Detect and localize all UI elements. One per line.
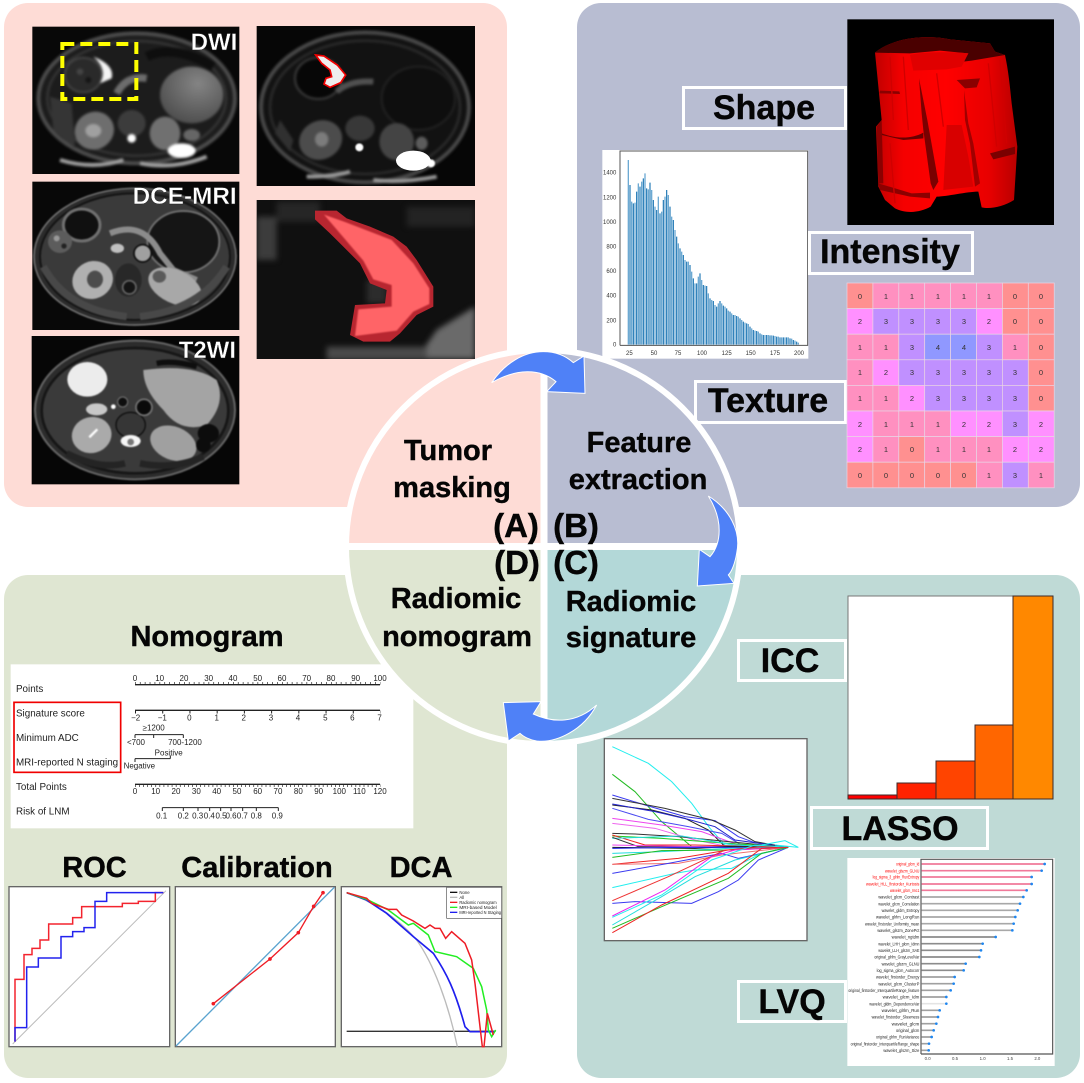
heatmap values: 3 bbox=[910, 317, 914, 326]
total points labels: 70 bbox=[274, 787, 283, 796]
arrow: radiomic signature to nomogram bbox=[503, 702, 597, 741]
total points labels: 40 bbox=[212, 787, 222, 796]
heatmap values: 1 bbox=[858, 343, 862, 352]
heatmap values: 3 bbox=[962, 394, 966, 403]
heading: Nomogram: Nomogram bbox=[130, 621, 284, 653]
arrow: feature extraction to radiomic signature bbox=[697, 496, 738, 586]
histogram axis labels: 1200 bbox=[603, 195, 617, 201]
lollipop dots bbox=[927, 863, 1046, 1052]
heatmap values: 0 bbox=[1039, 394, 1043, 403]
risk labels: 0.1 bbox=[156, 811, 168, 820]
heatmap values: 3 bbox=[987, 368, 991, 377]
points scale labels: 70 bbox=[302, 674, 312, 683]
ROC chart bbox=[9, 887, 170, 1047]
total points labels: 80 bbox=[294, 787, 303, 796]
histogram chart bbox=[602, 150, 808, 359]
feature names: wavelet_HLL_firstorder_Kurtosis bbox=[866, 882, 920, 888]
heatmap values: 0 bbox=[936, 471, 940, 480]
heatmap values: 2 bbox=[1013, 445, 1017, 454]
points scale labels: 80 bbox=[327, 674, 336, 683]
heatmap values: 0 bbox=[1013, 317, 1017, 326]
histogram axis labels: 800 bbox=[606, 244, 617, 250]
letter: B: (B) bbox=[553, 507, 599, 544]
row names: Total Points bbox=[16, 782, 67, 793]
signature score labels: 3 bbox=[269, 713, 274, 722]
stage label: Radiomic nomogram bbox=[382, 583, 532, 653]
label box: LASSO: LASSO bbox=[841, 810, 959, 848]
heatmap values: 1 bbox=[987, 292, 991, 301]
heatmap values: 1 bbox=[962, 445, 966, 454]
label: T2WI: T2WI bbox=[179, 337, 236, 364]
heatmap values: 2 bbox=[962, 420, 966, 429]
heatmap values: 1 bbox=[858, 394, 862, 403]
MRI image: tumor outline bbox=[257, 26, 475, 186]
points scale labels: 30 bbox=[204, 674, 214, 683]
histogram axis labels: 25 bbox=[626, 351, 633, 357]
stage label: Feature extraction bbox=[569, 427, 707, 496]
heatmap values: 2 bbox=[987, 420, 991, 429]
label box: Intensity: Intensity bbox=[820, 233, 960, 271]
total points labels: 110 bbox=[353, 787, 366, 796]
heatmap values: 1 bbox=[884, 420, 888, 429]
heatmap values: 0 bbox=[1039, 343, 1043, 352]
feature names: wavelet_LHH_glcm_Idmn bbox=[878, 941, 919, 947]
feature names: wavelet_glcm bbox=[892, 1021, 919, 1027]
row names: Signature score bbox=[16, 708, 85, 719]
feature names: original_glrlm_RunVariance bbox=[876, 1035, 919, 1041]
feature names: wavelet_glcm_ClusterP bbox=[878, 981, 920, 987]
DCA legend: MRI-based Model bbox=[459, 905, 497, 910]
histogram bars bbox=[628, 160, 798, 345]
heatmap values: 3 bbox=[936, 317, 940, 326]
feature names: wavelet_glcm_Idm bbox=[883, 995, 919, 1001]
points scale labels: 40 bbox=[229, 674, 238, 683]
row names: Points bbox=[16, 684, 43, 695]
minimum ADC labels: ≥1200 bbox=[143, 723, 165, 732]
image: 3D tumor shape bbox=[847, 19, 1054, 225]
label box: LASSO bbox=[812, 808, 988, 848]
DCA legend bbox=[447, 887, 502, 918]
feature names bbox=[848, 862, 920, 1054]
points scale labels bbox=[133, 674, 387, 683]
label box: LVQ: LVQ bbox=[758, 983, 826, 1021]
stage label: Radiomic signature bbox=[566, 586, 696, 654]
total points labels: 60 bbox=[253, 787, 263, 796]
heatmap values: 0 bbox=[1013, 292, 1017, 301]
heatmap values: 1 bbox=[858, 368, 862, 377]
N staging labels: Positive bbox=[155, 748, 183, 757]
histogram axis labels: 150 bbox=[746, 351, 756, 357]
heatmap values: 1 bbox=[936, 420, 940, 429]
nomogram axes bbox=[135, 683, 380, 811]
letter: C: (C) bbox=[553, 544, 599, 581]
central workflow disc bbox=[340, 340, 746, 750]
label: DCE-MRI: DCE-MRI bbox=[133, 183, 237, 210]
axis labels: 0.0 bbox=[925, 1056, 931, 1061]
heatmap values: 3 bbox=[1013, 394, 1017, 403]
letter: D: (D) bbox=[494, 544, 540, 581]
lollipop stems bbox=[922, 864, 1045, 1050]
DCA legend: MRI-reported N Staging bbox=[459, 910, 502, 915]
risk labels: 0.5 bbox=[215, 811, 227, 820]
feature names: wavelet_LLH_glszm_SAE bbox=[878, 948, 920, 954]
histogram axis labels: 125 bbox=[722, 351, 732, 357]
axis labels: 1.0 bbox=[980, 1056, 986, 1061]
signature score labels: 6 bbox=[350, 713, 355, 722]
points scale labels: 100 bbox=[373, 674, 387, 683]
feature names: wavelet_gldm_DependenceVar bbox=[869, 1001, 920, 1007]
heatmap values: 2 bbox=[1039, 420, 1043, 429]
heatmap values: 2 bbox=[987, 317, 991, 326]
heatmap values: 3 bbox=[910, 368, 914, 377]
ICC bar chart bbox=[848, 596, 1053, 799]
red tumor mask bbox=[315, 211, 433, 342]
panel: radiomic signature bbox=[577, 575, 1080, 1078]
label box: ICC bbox=[738, 640, 846, 680]
heatmap values: 0 bbox=[1039, 317, 1043, 326]
minimum ADC labels: <700 bbox=[127, 738, 146, 747]
risk labels: 0.9 bbox=[272, 811, 283, 820]
LASSO coefficient path chart bbox=[604, 739, 807, 941]
heatmap values: 4 bbox=[962, 343, 966, 352]
signature score labels bbox=[131, 713, 382, 722]
histogram axis labels: 1000 bbox=[603, 220, 617, 226]
feature names: original_glcm_Id bbox=[896, 862, 919, 868]
histogram axis labels: 100 bbox=[697, 351, 708, 357]
calibration chart bbox=[175, 887, 335, 1047]
heatmap values: 3 bbox=[884, 317, 888, 326]
points scale labels: 0 bbox=[133, 674, 138, 683]
heatmap values: 1 bbox=[987, 471, 991, 480]
heatmap values: 3 bbox=[910, 343, 914, 352]
signature score labels: 7 bbox=[377, 713, 382, 722]
DCA legend: Radiomic nomogram bbox=[459, 900, 497, 905]
risk labels bbox=[156, 811, 283, 820]
red selection box bbox=[14, 702, 121, 772]
DCA legend: None bbox=[459, 890, 470, 895]
heatmap values: 3 bbox=[1013, 420, 1017, 429]
total points labels: 10 bbox=[151, 787, 161, 796]
stage label: Tumor masking bbox=[393, 435, 511, 504]
histogram axis labels bbox=[603, 171, 805, 357]
feature names: log_sigma_glcm_Autocorr bbox=[877, 968, 920, 974]
histogram axis labels: 400 bbox=[606, 294, 617, 300]
heatmap values: 1 bbox=[1039, 471, 1043, 480]
label box: Shape: Shape bbox=[713, 89, 815, 127]
signature score labels: 4 bbox=[296, 713, 301, 722]
MRI image: T2WI bbox=[32, 336, 239, 484]
heading: DCA: DCA bbox=[390, 852, 452, 884]
feature names: wavelet_glszm_GLNU bbox=[882, 961, 920, 967]
stage label: Feature extraction: Feature bbox=[587, 427, 691, 459]
histogram axis labels: 75 bbox=[675, 351, 682, 357]
heatmap values: 1 bbox=[1013, 343, 1017, 352]
total points labels: 0 bbox=[133, 787, 138, 796]
panel: tumor masking bbox=[4, 3, 507, 507]
N staging labels: Negative bbox=[124, 761, 156, 770]
risk labels: 0.4 bbox=[204, 811, 215, 820]
label box: LVQ bbox=[738, 982, 846, 1022]
histogram axis labels: 200 bbox=[606, 318, 617, 324]
axis labels: 0.5 bbox=[952, 1056, 959, 1061]
heatmap values: 2 bbox=[858, 317, 862, 326]
heatmap values: 2 bbox=[884, 368, 888, 377]
feature names: wavelet_firstorder_Uniformity_mean bbox=[865, 921, 919, 927]
heatmap values: 0 bbox=[1039, 292, 1043, 301]
total points labels bbox=[133, 787, 387, 796]
histogram axis labels: 0 bbox=[613, 343, 617, 349]
feature names: original_glcm bbox=[896, 1028, 919, 1034]
MRI image: DWI bbox=[32, 27, 239, 174]
feature names: wavelet_glrlm_LongRun bbox=[876, 915, 920, 921]
feature names: wavelet_firstorder_Energy bbox=[876, 975, 920, 981]
heading: Calibration: Calibration bbox=[181, 852, 333, 884]
total points labels: 30 bbox=[192, 787, 201, 796]
total points labels: 20 bbox=[172, 787, 181, 796]
histogram axis labels: 1400 bbox=[603, 171, 617, 177]
heatmap values: 1 bbox=[910, 420, 914, 429]
axis labels: 1.5 bbox=[1007, 1056, 1014, 1061]
label box: Texture: Texture bbox=[708, 382, 828, 420]
minimum ADC labels bbox=[127, 723, 202, 747]
feature names: wavelet_firstorder_Skewness bbox=[872, 1015, 920, 1021]
feature names: wavelet_glrlm_Run bbox=[882, 1008, 920, 1014]
histogram axis labels: 175 bbox=[770, 351, 781, 357]
heatmap values: 2 bbox=[858, 420, 862, 429]
heatmap values: 1 bbox=[884, 292, 888, 301]
total points labels: 50 bbox=[233, 787, 242, 796]
histogram axis labels: 600 bbox=[606, 269, 617, 275]
feature names: wavelet_glszm_Size bbox=[883, 1048, 920, 1054]
points scale labels: 60 bbox=[278, 674, 287, 683]
heatmap values: 3 bbox=[936, 394, 940, 403]
DCA chart bbox=[341, 887, 502, 1047]
heatmap values: 1 bbox=[936, 445, 940, 454]
points scale labels: 90 bbox=[351, 674, 361, 683]
stage label: Radiomic signature: signature bbox=[566, 622, 696, 654]
nomogram chart bbox=[11, 664, 413, 828]
stage label: Radiomic nomogram: nomogram bbox=[382, 621, 532, 653]
points scale labels: 10 bbox=[155, 674, 165, 683]
feature names: wavelet_glszm_GLNU bbox=[885, 868, 920, 874]
feature names: original_glrlm_GrayLevelVar bbox=[874, 955, 920, 961]
heatmap values: 1 bbox=[884, 394, 888, 403]
heatmap values: 4 bbox=[936, 343, 940, 352]
heatmap values: 3 bbox=[962, 317, 966, 326]
stage label: Tumor masking: Tumor bbox=[404, 435, 492, 467]
LVQ feature importance chart bbox=[847, 858, 1055, 1066]
heatmap values: 1 bbox=[962, 292, 966, 301]
heatmap values: 3 bbox=[987, 394, 991, 403]
feature names: wavelet_glcm_Contrast bbox=[878, 895, 920, 901]
risk labels: 0.8 bbox=[251, 811, 262, 820]
feature names: log_sigma_3_glrlm_RunEntropy bbox=[873, 875, 920, 881]
texture matrix heatmap bbox=[847, 283, 1054, 488]
MRI image: magnified tumor mask bbox=[257, 200, 475, 360]
risk labels: 0.3 bbox=[192, 811, 204, 820]
heatmap values: 1 bbox=[987, 445, 991, 454]
heatmap values: 3 bbox=[987, 343, 991, 352]
signature score labels: −2 bbox=[131, 713, 141, 722]
signature score labels: 1 bbox=[214, 713, 219, 722]
heatmap values: 0 bbox=[962, 471, 966, 480]
feature names: wavelet_glszm_ZonePct bbox=[877, 928, 920, 934]
axis labels: 2.0 bbox=[1034, 1056, 1041, 1061]
label box: Shape bbox=[684, 88, 846, 128]
heatmap values: 0 bbox=[858, 292, 862, 301]
label box: ICC: ICC bbox=[761, 642, 819, 680]
risk labels: 0.2 bbox=[178, 811, 189, 820]
letter: A: (A) bbox=[493, 507, 539, 544]
tumor contour bbox=[316, 55, 346, 87]
total points labels: 120 bbox=[373, 787, 387, 796]
stage label: Radiomic signature: Radiomic bbox=[566, 586, 696, 618]
feature names: original_firstorder_InterquartileRange_shape bbox=[851, 1041, 919, 1047]
panel: radiomic nomogram bbox=[4, 575, 507, 1078]
heatmap values: 1 bbox=[910, 292, 914, 301]
heatmap values: 1 bbox=[884, 445, 888, 454]
arrow: tumor masking to feature extraction bbox=[492, 352, 585, 393]
signature score labels: −1 bbox=[158, 713, 167, 722]
heatmap values: 1 bbox=[884, 343, 888, 352]
feature names: wavelet_glcm_Correlation bbox=[878, 901, 919, 907]
heatmap values: 3 bbox=[1013, 471, 1017, 480]
heatmap values: 0 bbox=[1039, 368, 1043, 377]
signature score labels: 0 bbox=[187, 713, 192, 722]
N staging labels bbox=[124, 748, 183, 770]
points scale labels: 50 bbox=[253, 674, 263, 683]
feature names: wavelet_ngtdm bbox=[892, 935, 919, 941]
MRI image: DCE-MRI bbox=[32, 182, 239, 330]
feature names: original_firstorder_InterquartileRange_feature bbox=[848, 988, 919, 994]
heatmap values bbox=[858, 292, 1043, 480]
risk labels: 0.7 bbox=[237, 811, 248, 820]
heatmap values: 1 bbox=[936, 292, 940, 301]
signature score labels: 2 bbox=[241, 713, 246, 722]
axis labels bbox=[925, 1056, 1041, 1061]
points scale labels: 20 bbox=[180, 674, 189, 683]
stage label: Tumor masking: masking bbox=[393, 472, 511, 504]
signature score labels: 5 bbox=[323, 713, 328, 722]
heatmap values: 0 bbox=[910, 445, 914, 454]
histogram axis labels: 50 bbox=[651, 351, 658, 357]
row names bbox=[16, 684, 118, 817]
row names: MRI-reported N staging bbox=[16, 758, 118, 769]
heatmap values: 2 bbox=[910, 394, 914, 403]
DCA legend: All bbox=[459, 895, 464, 900]
dashed tumor marker bbox=[62, 44, 136, 99]
heatmap values: 0 bbox=[910, 471, 914, 480]
heatmap values: 3 bbox=[1013, 368, 1017, 377]
heatmap values: 3 bbox=[962, 368, 966, 377]
heading: ROC: ROC bbox=[62, 852, 127, 884]
label: DWI: DWI bbox=[191, 29, 237, 56]
feature names: wavelet_glcm_Imc1 bbox=[890, 888, 919, 894]
heatmap values: 2 bbox=[1039, 445, 1043, 454]
heatmap values: 0 bbox=[858, 471, 862, 480]
heatmap values: 0 bbox=[884, 471, 888, 480]
panel: feature extraction bbox=[577, 3, 1080, 507]
total points labels: 90 bbox=[314, 787, 324, 796]
minimum ADC labels: 700-1200 bbox=[168, 738, 202, 747]
risk labels: 0.6 bbox=[225, 811, 237, 820]
heatmap values: 3 bbox=[936, 368, 940, 377]
stage label: Feature extraction: extraction bbox=[569, 464, 707, 496]
row names: Minimum ADC bbox=[16, 733, 79, 744]
histogram axis labels: 200 bbox=[794, 351, 805, 357]
row names: Risk of LNM bbox=[16, 806, 70, 817]
feature names: wavelet_gldm_Entropy bbox=[882, 908, 920, 914]
total points labels: 100 bbox=[333, 787, 347, 796]
heatmap values: 2 bbox=[858, 445, 862, 454]
stage label: Radiomic nomogram: Radiomic bbox=[391, 583, 521, 615]
